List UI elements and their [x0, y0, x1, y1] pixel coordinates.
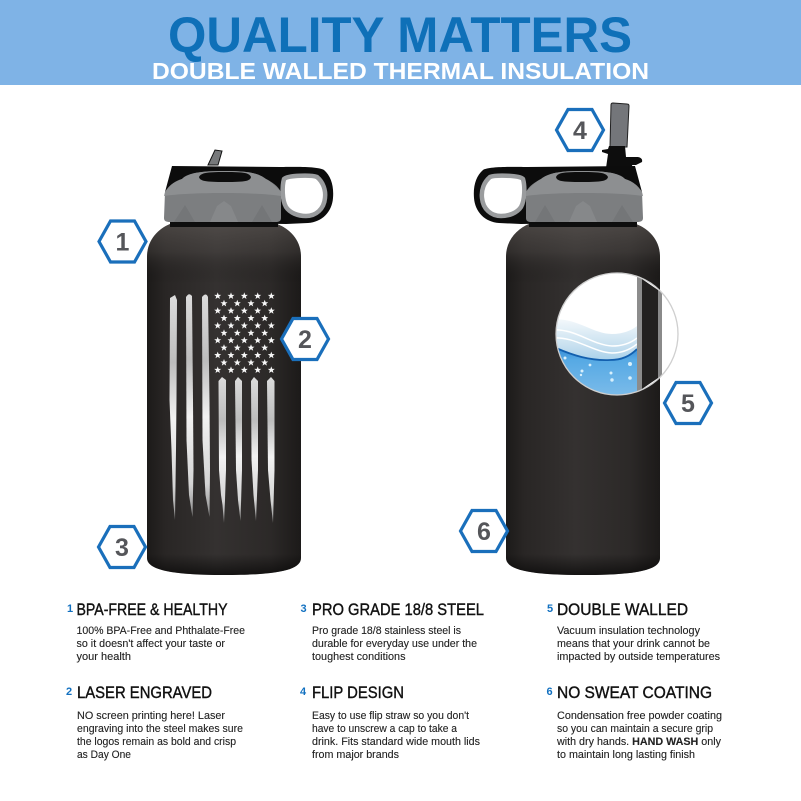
feature 1: BPA-free	[67, 601, 245, 663]
feature 1: BPA-free: so it doesn't affect your taste or	[76, 638, 225, 650]
feature 3: pro grade steel: Pro grade 18/8 stainless steel is	[312, 625, 461, 637]
left bottle	[147, 150, 333, 575]
bottle shading	[147, 224, 301, 575]
feature 4: flip design: from major brands	[312, 749, 399, 761]
feature 3: pro grade steel: toughest conditions	[312, 651, 406, 663]
feature 5: double walled	[547, 601, 720, 663]
right bottle	[474, 103, 678, 575]
feature 1: BPA-free: 100% BPA-Free and Phthalate-Free	[76, 625, 245, 637]
feature 6: no sweat coating: with dry hands. HAND WASH only	[556, 736, 721, 748]
feature 5: double walled: impacted by outside temperatures	[557, 651, 720, 663]
bubbles	[564, 356, 632, 382]
feature 4: flip design: FLIP DESIGN	[312, 684, 404, 702]
waves	[556, 320, 637, 360]
feature 3: pro grade steel: PRO GRADE 18/8 STEEL	[312, 601, 484, 619]
long stripes	[170, 294, 210, 520]
feature 6: no sweat coating: so you can maintain a secure grip	[557, 723, 713, 735]
feature 2: laser engraved	[66, 684, 243, 761]
bottle body	[506, 224, 660, 575]
feature 6: no sweat coating: NO SWEAT COATING	[557, 684, 712, 702]
feature 2: laser engraved: the logos remain as bold and crisp	[77, 736, 236, 748]
title: QUALITY MATTERS	[168, 7, 632, 63]
feature 2: laser engraved: LASER ENGRAVED	[77, 684, 212, 702]
short stripes	[218, 377, 274, 523]
badge 5: 5	[681, 390, 695, 418]
badge 2: 2	[298, 326, 312, 354]
badge 2	[282, 318, 328, 360]
inner wall	[637, 273, 642, 395]
engraved flag	[170, 292, 275, 523]
feature 4: flip design: Easy to use flip straw so you don't	[312, 710, 470, 722]
feature 3: pro grade steel	[300, 601, 484, 663]
feature 4: flip design: drink. Fits standard wide mouth lids	[312, 736, 480, 748]
water	[558, 350, 637, 394]
vacuum gap	[642, 279, 658, 389]
feature 1: BPA-free: your health	[76, 651, 131, 663]
feature 5: double walled: means that your drink cannot be	[557, 638, 710, 650]
badge 4	[556, 110, 604, 150]
feature 6: no sweat coating	[546, 684, 722, 761]
feature 4: flip design: have to unscrew a cap to take a	[312, 723, 458, 735]
badge 4: 4	[573, 117, 587, 145]
badge 3: 3	[115, 534, 129, 562]
badge 6	[460, 510, 508, 552]
stars	[214, 292, 275, 373]
feature 3: pro grade steel: durable for everyday use under the	[312, 638, 477, 650]
subtitle: DOUBLE WALLED THERMAL INSULATION	[152, 58, 649, 84]
cap and handle	[164, 166, 333, 227]
feature 6: no sweat coating: to maintain long lasting finish	[557, 749, 695, 761]
feature 4: flip design	[300, 684, 480, 761]
feature 2: laser engraved: NO screen printing here! Laser	[77, 710, 225, 722]
straw stub	[208, 150, 222, 165]
feature 4: flip design: 4	[300, 686, 307, 698]
feature 2: laser engraved: 2	[66, 686, 72, 698]
bottle body	[147, 224, 301, 575]
flip straw	[602, 103, 642, 172]
magnifier: double wall cutaway	[556, 274, 662, 394]
feature 5: double walled: Vacuum insulation technology	[557, 625, 700, 637]
feature 2: laser engraved: engraving into the steel makes sure	[77, 723, 243, 735]
badge 6: 6	[477, 518, 491, 546]
badge 1: 1	[116, 228, 130, 256]
feature 5: double walled: 5	[547, 603, 553, 615]
magnifier outline	[556, 273, 678, 395]
cap and handle	[474, 166, 643, 227]
feature 5: double walled: DOUBLE WALLED	[557, 601, 688, 619]
badge 5	[664, 382, 712, 424]
feature 6: no sweat coating: Condensation free powder coating	[557, 710, 722, 722]
badge 1	[99, 221, 146, 262]
outer wall	[658, 290, 662, 378]
feature 1: BPA-free: 1	[67, 603, 73, 615]
bottle shading	[506, 224, 660, 575]
feature 1: BPA-free: BPA-FREE & HEALTHY	[76, 601, 228, 619]
feature 2: laser engraved: as Day One	[77, 749, 131, 761]
badge 3	[98, 526, 146, 568]
feature 3: pro grade steel: 3	[300, 603, 307, 615]
feature 6: no sweat coating: 6	[546, 686, 553, 698]
header band	[0, 0, 801, 85]
